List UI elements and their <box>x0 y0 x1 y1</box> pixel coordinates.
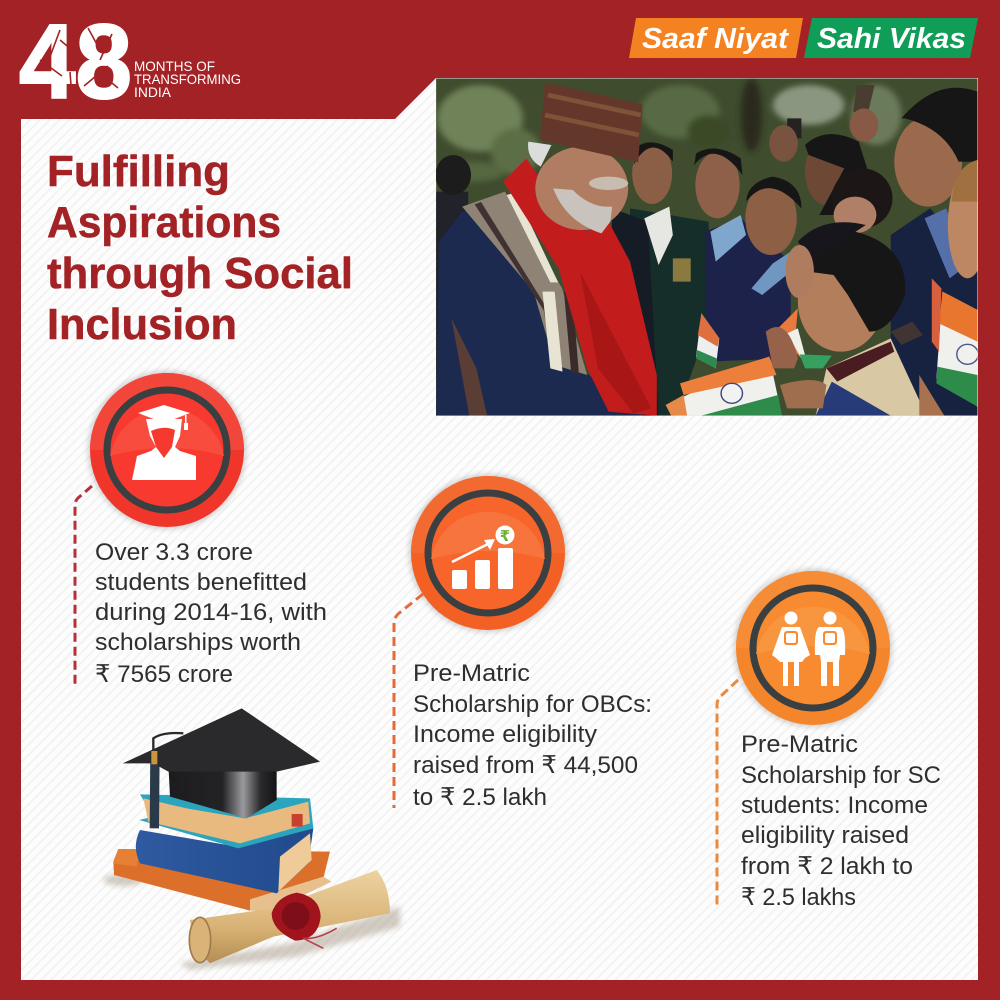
photo: Prime Minister greeting students with flags <box>435 78 987 416</box>
text: scholarship for OBCs: to ₹ 2.5 lakh <box>413 784 547 811</box>
text: students benefitted <box>95 539 327 688</box>
wax seal <box>272 893 337 948</box>
boy in foreground <box>785 222 926 416</box>
badge: Sahi Vikas <box>804 18 978 58</box>
logo: 48 months of transforming India: INDIA <box>134 84 172 100</box>
text: scholarship for SC students: Scholarship for SC <box>741 762 941 789</box>
icon: red button with graduate <box>88 371 246 529</box>
title: Fulfilling <box>47 147 230 196</box>
title <box>47 147 353 349</box>
text: scholarship for SC students: from ₹ 2 lakh to <box>741 853 913 880</box>
text: students benefitted: Over 3.3 crore <box>95 539 253 566</box>
Prime Minister <box>436 82 657 416</box>
dashed connector 1 <box>75 486 92 688</box>
text: scholarship for SC students: eligibility raised <box>741 822 909 849</box>
text: scholarship for OBCs <box>413 660 652 811</box>
icon: amber button with students <box>734 569 892 727</box>
people in the background <box>435 85 987 416</box>
teal book <box>139 794 313 848</box>
text: scholarship for OBCs: Scholarship for OBCs: <box>413 691 652 718</box>
graduate figure <box>132 405 196 480</box>
blue book <box>136 828 313 893</box>
dashed connector 2 <box>394 594 423 808</box>
logo: 48 months of transforming India: MONTHS OF <box>134 58 215 74</box>
illustration: graduation cap on books with scroll <box>103 708 400 970</box>
badge: Saaf Niyat: Saaf Niyat <box>642 23 789 55</box>
tassel <box>140 752 169 828</box>
text: students benefitted: scholarships worth <box>95 629 301 656</box>
orange book <box>113 849 332 912</box>
dashed connector 3 <box>717 680 738 905</box>
title: Aspirations <box>47 198 281 247</box>
text: scholarship for SC students: students: Income <box>741 792 928 819</box>
text: scholarship for OBCs: raised from ₹ 44,500 <box>413 752 638 779</box>
text: students benefitted: students benefitted <box>95 569 307 596</box>
text: scholarship for SC students: Pre-Matric <box>741 731 858 758</box>
bars and arrow: ₹ <box>500 527 510 545</box>
text: scholarship for OBCs: Income eligibility <box>413 721 598 748</box>
two students with backpacks <box>772 612 845 686</box>
icon: orange button with rising bars <box>409 474 567 632</box>
logo: 48 months of transforming India <box>19 3 241 121</box>
text: students benefitted: ₹ 7565 crore <box>95 661 233 688</box>
text: students benefitted: during 2014-16, with <box>95 599 327 626</box>
title: Inclusion <box>47 300 237 349</box>
shadows <box>103 874 400 970</box>
bars and arrow <box>452 526 514 589</box>
text: scholarship for OBCs: Pre-Matric <box>413 660 530 687</box>
cap <box>123 708 320 818</box>
badge: Saaf Niyat <box>629 18 803 58</box>
badge: Sahi Vikas: Sahi Vikas <box>817 23 966 55</box>
logo: 48 months of transforming India: TRANSFORMING <box>134 71 241 87</box>
text: scholarship for SC students: ₹ 2.5 lakhs <box>741 884 856 911</box>
scroll <box>189 870 390 963</box>
text: scholarship for SC students <box>741 731 941 911</box>
title: through Social <box>47 249 353 298</box>
flags <box>666 278 978 416</box>
logo: 48 months of transforming India: 48 <box>19 3 132 121</box>
